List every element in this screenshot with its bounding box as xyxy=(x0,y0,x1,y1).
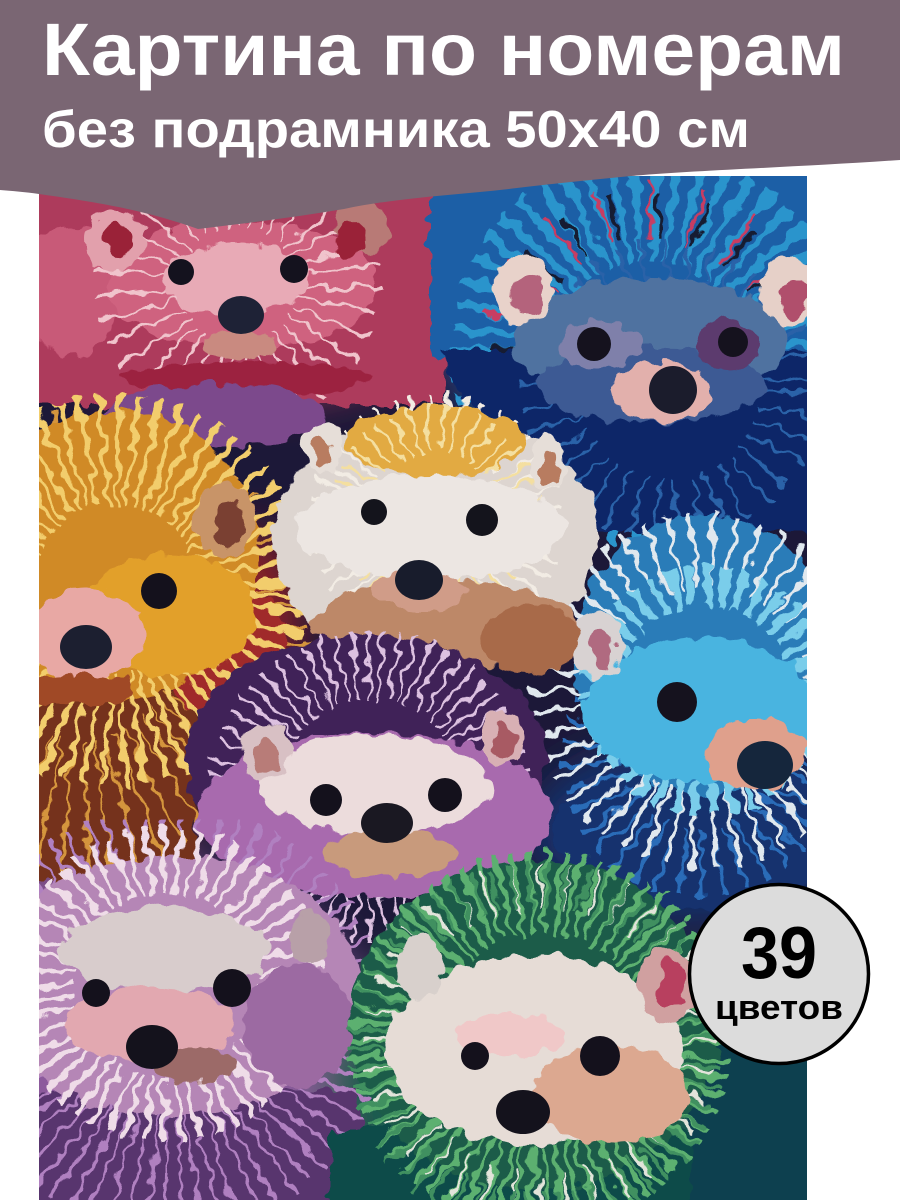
hedgehog: light blue right xyxy=(555,515,845,910)
eye xyxy=(461,1042,489,1070)
badge: 39 colours xyxy=(690,884,868,1064)
eye xyxy=(141,573,177,609)
eye xyxy=(428,778,462,812)
banner xyxy=(0,0,900,229)
nose xyxy=(737,741,793,789)
nose xyxy=(395,560,443,600)
nose xyxy=(361,803,413,843)
hedgehog: purple centre xyxy=(185,635,553,915)
title: Картина по номерам xyxy=(42,8,845,91)
hedgehog: lilac bottom left xyxy=(0,855,360,1200)
eye xyxy=(168,259,194,285)
hedgehog: red top left xyxy=(39,194,448,450)
eye xyxy=(657,682,697,722)
badge label: цветов xyxy=(715,989,843,1027)
nose xyxy=(496,1090,550,1134)
badge number: 39 xyxy=(741,913,817,994)
hedgehog: yellow left xyxy=(0,410,287,880)
eye xyxy=(466,504,498,536)
eye xyxy=(580,1036,620,1076)
nose xyxy=(60,625,112,669)
eye xyxy=(82,979,110,1007)
nose xyxy=(218,296,264,334)
eye xyxy=(577,327,611,361)
eye xyxy=(280,255,308,283)
eye xyxy=(718,327,748,357)
nose xyxy=(649,366,697,414)
underpainting xyxy=(39,362,807,1134)
nose xyxy=(126,1025,178,1069)
eye xyxy=(213,969,251,1007)
eye xyxy=(310,784,342,816)
hedgehog: blue top right xyxy=(430,170,820,530)
eye xyxy=(361,499,387,525)
painting: hedgehogs xyxy=(39,176,807,1200)
hedgehog: white centre xyxy=(273,407,597,674)
hedgehog: green bottom xyxy=(330,860,820,1200)
subtitle: без подрамника 50х40 см xyxy=(42,101,750,159)
